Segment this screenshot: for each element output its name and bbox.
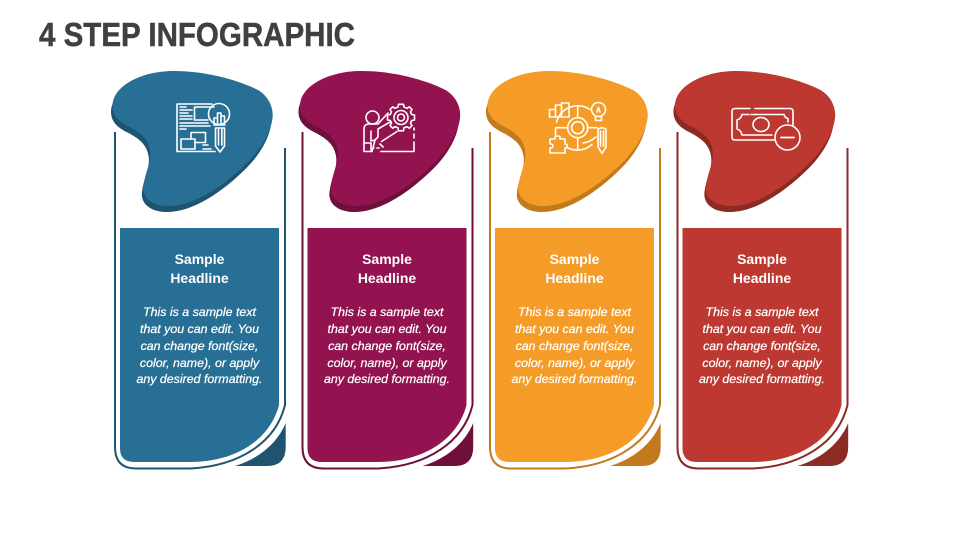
colour card [308, 228, 466, 462]
body text: that you can edit. You [703, 322, 822, 336]
body text [511, 305, 638, 386]
body text: any desired formatting. [511, 372, 638, 386]
outline frame [302, 132, 472, 468]
blob [112, 71, 273, 206]
heading: Sample [737, 251, 787, 267]
outline frame [678, 132, 848, 468]
body text: This is a sample text [706, 305, 819, 319]
blob [300, 71, 460, 206]
body text: that you can edit. You [140, 322, 259, 336]
blob shadow [298, 77, 459, 212]
blob [488, 71, 648, 206]
body text: any desired formatting. [136, 372, 263, 386]
body text: This is a sample text [143, 305, 257, 319]
panel: step 1: Headline [170, 270, 229, 286]
panel: step 2 [298, 71, 473, 468]
body text [136, 305, 263, 386]
panel: step 2: Headline [358, 270, 416, 286]
body text: any desired formatting. [699, 372, 825, 386]
body text: that you can edit. You [328, 322, 447, 336]
outline frame [490, 132, 660, 468]
heading: Sample [550, 251, 600, 267]
colour card [682, 228, 842, 462]
panel: step 3: Headline [545, 270, 604, 286]
blob shadow [486, 77, 646, 212]
body text: that you can edit. You [515, 322, 634, 336]
panel: step 1 [111, 71, 286, 468]
colour card [120, 228, 279, 462]
blob shadow [111, 77, 271, 212]
panel: step 4: Headline [733, 270, 791, 286]
body text [324, 305, 450, 386]
body text: can change font(size, [516, 339, 633, 353]
corner wedge [798, 423, 848, 466]
corner wedge [610, 423, 661, 466]
heading: Sample [362, 251, 412, 267]
icon: gear, chart, bulb, puzzle and pencil [550, 102, 606, 154]
body text: color, name), or apply [140, 356, 260, 370]
body text: This is a sample text [331, 305, 444, 319]
body text: color, name), or apply [515, 356, 635, 370]
body text: can change font(size, [141, 339, 258, 353]
body text: color, name), or apply [327, 356, 447, 370]
colour card [495, 228, 654, 462]
corner wedge [235, 423, 286, 466]
body text: can change font(size, [703, 339, 821, 353]
body text: This is a sample text [518, 305, 632, 319]
panel: step 3 [486, 71, 661, 468]
heading: Sample [175, 251, 225, 267]
outline frame [115, 132, 285, 468]
body text: any desired formatting. [324, 372, 450, 386]
corner wedge [422, 423, 473, 466]
title: 4 STEP INFOGRAPHIC [39, 16, 355, 53]
icon: person pushing gear [364, 104, 414, 152]
body text [699, 305, 825, 386]
panel: step 4 [674, 71, 848, 468]
body text: color, name), or apply [702, 356, 822, 370]
blob [675, 71, 835, 206]
blob shadow [674, 77, 834, 212]
body text: can change font(size, [328, 339, 446, 353]
icon: banknote with minus [732, 108, 800, 150]
icon: plan document with lightbulb pencil [177, 104, 230, 152]
